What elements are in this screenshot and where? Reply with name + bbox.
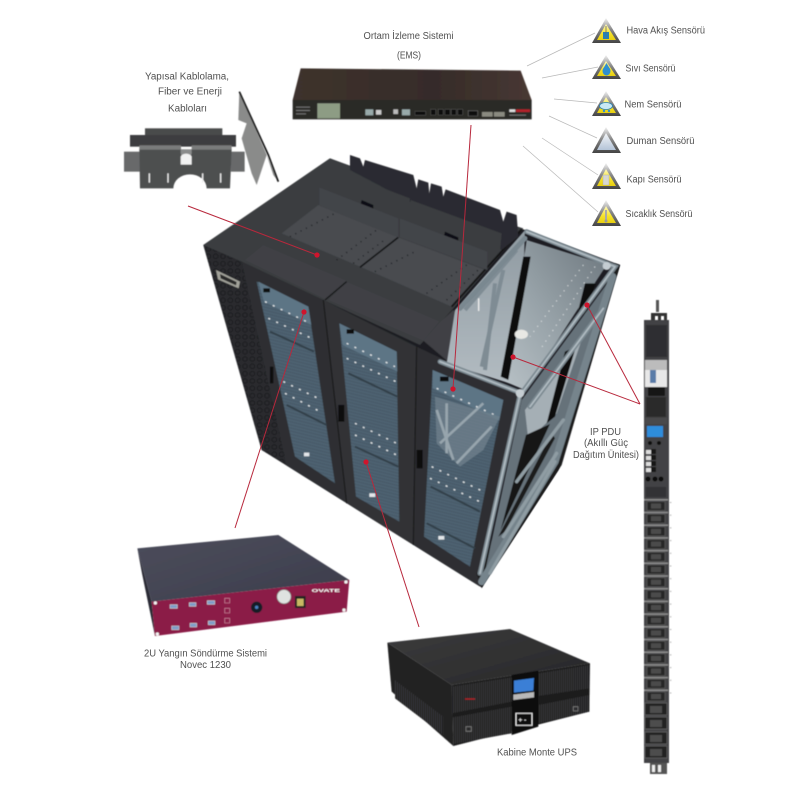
heading: EMS — [364, 29, 454, 62]
rear wall perforations — [530, 265, 595, 350]
interior left wall — [447, 230, 525, 387]
sensor connector lines — [523, 33, 598, 212]
device: rack-mount UPS — [387, 629, 590, 746]
heading: EMS: Ortam İzleme Sistemi — [364, 29, 454, 42]
sensor: liquid — [592, 55, 621, 79]
label: airflow sensor: Hava Akış Sensörü — [626, 26, 705, 36]
red callout lines — [188, 125, 640, 627]
side face panels — [525, 335, 583, 440]
device: EMS unit — [293, 68, 532, 119]
label: temperature sensor: Sıcaklık Sensörü — [626, 209, 692, 220]
sensor: smoke — [592, 127, 621, 153]
cable tray combs — [350, 155, 518, 250]
heading: cabling: Fiber ve Enerji — [158, 86, 222, 98]
frame posts and beams — [440, 232, 615, 582]
side face fill — [483, 275, 613, 580]
door seams — [323, 300, 417, 545]
heading: cabling: Kabloları — [168, 104, 207, 114]
heading: EMS: (EMS) — [397, 50, 421, 62]
outer right edge — [477, 263, 620, 588]
plate seams — [325, 229, 522, 307]
door windows — [257, 282, 335, 483]
top surface — [203, 158, 523, 345]
heading: cabling — [145, 72, 229, 114]
top plates — [282, 205, 398, 267]
sensor: airflow — [592, 18, 621, 43]
label: door sensor: Kapı Sensörü — [626, 174, 682, 186]
inner struts — [465, 250, 517, 370]
window badges — [304, 453, 444, 540]
outer shell — [203, 158, 620, 587]
sensor: temperature — [592, 200, 621, 226]
red callout dots — [301, 252, 590, 465]
internal PDU strips — [501, 257, 531, 380]
interior rear wall — [505, 240, 607, 390]
window LEDs — [265, 302, 498, 503]
cabinet: main micro data centre — [203, 155, 620, 588]
door handles — [270, 367, 423, 468]
sensor: humidity — [592, 91, 621, 116]
front doors — [242, 262, 347, 503]
device: IP PDU strip — [644, 300, 672, 774]
sensor: door — [592, 163, 621, 189]
plate perforations — [290, 213, 480, 300]
label: humidity sensor: Nem Sensörü — [624, 100, 682, 110]
device: rack-mount UPS: + - — [518, 717, 526, 724]
device: cable brackets — [124, 92, 278, 188]
heading: cabling: Yapısal Kablolama, — [145, 72, 229, 82]
label: IP PDU: IP PDU — [590, 427, 621, 438]
left side panel — [203, 245, 287, 465]
label: fire suppression: 2U Yangın Söndürme Sistemi — [144, 648, 267, 660]
label: fire suppression — [144, 648, 267, 671]
cabinet: open frame side — [440, 230, 620, 588]
label: fire suppression: Novec 1230 — [180, 660, 231, 671]
label: IP PDU: Dağıtım Ünitesi) — [573, 449, 639, 461]
device: 2U fire suppression — [137, 535, 349, 636]
label: smoke sensor: Duman Sensörü — [626, 136, 694, 147]
hole cover — [515, 330, 528, 339]
label: IP PDU: (Akıllı Güç — [584, 438, 628, 449]
label: IP PDU — [573, 427, 639, 461]
label: UPS: Kabine Monte UPS — [497, 748, 577, 758]
frame seen through door — [435, 397, 500, 467]
device: 2U fire suppression: OVATE — [312, 588, 340, 593]
label: liquid sensor: Sıvı Sensörü — [626, 64, 676, 74]
window shelf bands — [270, 332, 480, 548]
